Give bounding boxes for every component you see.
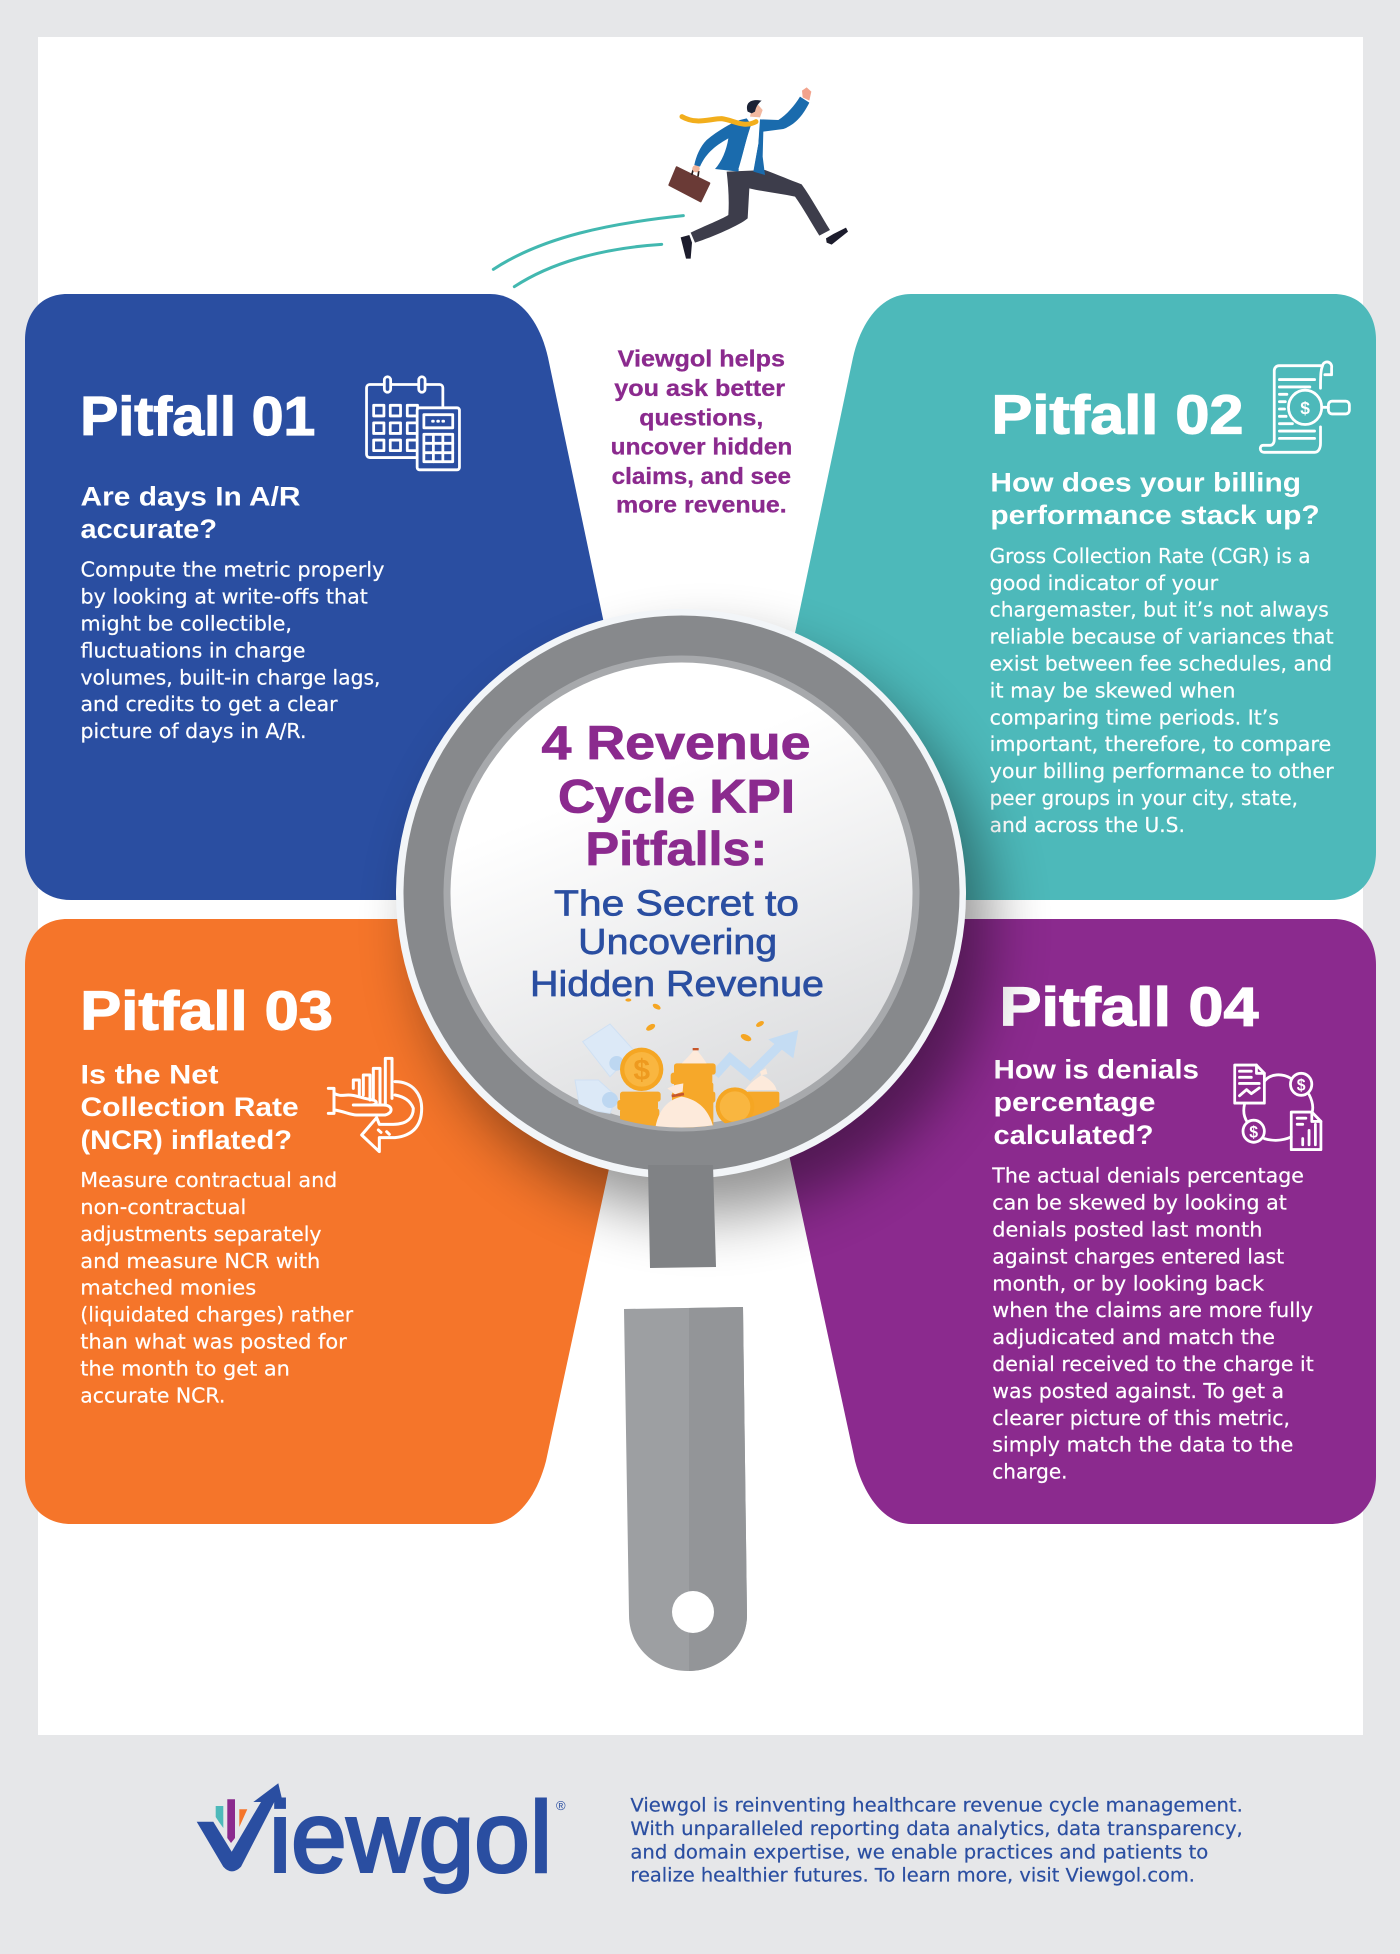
body text: denials posted last month	[992, 1218, 1262, 1242]
body text: it may be skewed when	[990, 678, 1236, 702]
callout: Viewgol helps	[611, 346, 792, 518]
body text: than what was posted for	[80, 1330, 348, 1354]
body text: Measure contractual and	[80, 1168, 337, 1192]
body text	[990, 544, 1334, 837]
question	[994, 1055, 1199, 1150]
subtitle: The Secret to Uncovering Hidden Revenue: The Secret to	[554, 883, 799, 924]
body text: exist between fee schedules, and	[990, 652, 1332, 676]
body text: against charges entered last	[992, 1244, 1284, 1268]
callout: Viewgol helps: you ask better	[614, 375, 785, 401]
callout: Viewgol helps: uncover hidden	[611, 434, 792, 460]
icon: hand with bar chart and return arrow	[328, 1058, 422, 1152]
illustration: coins and money	[575, 998, 798, 1132]
body text: Compute the metric properly	[80, 558, 385, 582]
footer description: Viewgol is reinventing healthcare revenue cycle management.	[630, 1796, 1243, 1817]
question: accurate?	[80, 514, 217, 544]
question: (NCR) inflated?	[80, 1125, 292, 1155]
body text: comparing time periods. It’s	[990, 705, 1279, 729]
illustration: running businessman with briefcase	[493, 87, 848, 287]
illustration: coins and money: $	[633, 1054, 650, 1087]
subtitle: The Secret to Uncovering Hidden Revenue: Hidden Revenue	[530, 963, 824, 1004]
callout: Viewgol helps: more revenue.	[616, 492, 787, 518]
footer description	[630, 1796, 1243, 1887]
subtitle: The Secret to Uncovering Hidden Revenue: Uncovering	[578, 921, 777, 962]
panel: Pitfall 02	[791, 294, 1376, 900]
magnifying glass lens	[396, 609, 966, 1179]
question: calculated?	[994, 1120, 1154, 1150]
body text: can be skewed by looking at	[992, 1191, 1287, 1215]
body text: month, or by looking back	[992, 1271, 1264, 1295]
body text: denial received to the charge it	[992, 1352, 1314, 1376]
footer logo: Viewgol: ®	[556, 1798, 566, 1813]
heading: Pitfall 03: Pitfall 03	[80, 980, 333, 1042]
body text: was posted against. To get a	[992, 1379, 1284, 1403]
body text: The actual denials percentage	[991, 1164, 1304, 1188]
title: 4 Revenue Cycle KPI Pitfalls: 4 Revenue	[542, 716, 810, 769]
body text: peer groups in your city, state,	[990, 786, 1298, 810]
body text: accurate NCR.	[80, 1383, 225, 1407]
body text: your billing performance to other	[990, 759, 1334, 783]
panel: Pitfall 01	[25, 294, 610, 900]
lens drop shadow	[420, 645, 990, 1215]
title: 4 Revenue Cycle KPI Pitfalls: Pitfalls:	[586, 822, 767, 875]
question: Is the Net	[80, 1060, 219, 1090]
question: How is denials	[994, 1055, 1199, 1085]
question	[80, 481, 300, 544]
title: 4 Revenue Cycle KPI Pitfalls	[542, 716, 810, 875]
body text: and credits to get a clear	[80, 692, 338, 716]
icon: documents and dollar cycle: $	[1249, 1123, 1258, 1141]
body text	[80, 1168, 354, 1407]
magnifying glass handle	[624, 1307, 747, 1671]
body text: non-contractual	[80, 1195, 246, 1219]
body text: chargemaster, but it’s not always	[990, 598, 1329, 622]
body text	[80, 558, 385, 743]
callout: Viewgol helps: Viewgol helps	[618, 346, 785, 372]
body text: picture of days in A/R.	[80, 719, 306, 743]
body text: and across the U.S.	[990, 813, 1185, 837]
body text: adjudicated and match the	[992, 1325, 1275, 1349]
body text: matched monies	[80, 1276, 256, 1300]
question	[80, 1060, 299, 1155]
question: Collection Rate	[80, 1092, 299, 1122]
question: percentage	[994, 1087, 1156, 1117]
panel: Pitfall 04	[788, 919, 1376, 1524]
body text: volumes, built-in charge lags,	[80, 665, 381, 689]
icon: documents and dollar cycle: $	[1297, 1076, 1306, 1094]
body text: might be collectible,	[80, 612, 292, 636]
heading: Pitfall 04: Pitfall 04	[1000, 976, 1259, 1038]
body text: reliable because of variances that	[990, 625, 1334, 649]
body text: fluctuations in charge	[80, 638, 306, 662]
body text: charge.	[992, 1460, 1068, 1484]
body text: clearer picture of this metric,	[992, 1406, 1290, 1430]
question: How does your billing	[990, 467, 1301, 497]
footer description: realize healthier futures. To learn more, visit Viewgol.com.	[630, 1866, 1195, 1887]
body text: good indicator of your	[990, 571, 1219, 595]
icon: calendar and calculator	[367, 377, 459, 470]
panel: Pitfall 03	[25, 919, 613, 1524]
question	[990, 467, 1320, 530]
heading: Pitfall 01: Pitfall 01	[80, 385, 315, 447]
body text	[991, 1164, 1314, 1484]
body text: important, therefore, to compare	[990, 732, 1331, 756]
icon: documents and dollar cycle	[1235, 1065, 1321, 1150]
callout: Viewgol helps: claims, and see	[612, 463, 791, 489]
magnifying glass neck	[648, 1165, 716, 1268]
body text: by looking at write-offs that	[80, 585, 368, 609]
body text: and measure NCR with	[80, 1249, 320, 1273]
body text: when the claims are more fully	[992, 1298, 1313, 1322]
body text: adjustments separately	[80, 1222, 322, 1246]
footer description: With unparalleled reporting data analytics, data transparency,	[630, 1819, 1243, 1840]
heading: Pitfall 02: Pitfall 02	[992, 384, 1244, 446]
icon: receipt with dollar lens: $	[1300, 398, 1310, 418]
body text: simply match the data to the	[992, 1433, 1293, 1457]
footer logo: Viewgol: iewgol	[269, 1782, 552, 1894]
callout: Viewgol helps: questions,	[639, 405, 763, 431]
question: performance stack up?	[990, 500, 1320, 530]
body text: the month to get an	[80, 1356, 290, 1380]
title: 4 Revenue Cycle KPI Pitfalls: Cycle KPI	[558, 769, 795, 822]
footer description: and domain expertise, we enable practices and patients to	[630, 1842, 1208, 1863]
body text: Gross Collection Rate (CGR) is a	[990, 544, 1311, 568]
subtitle: The Secret to Uncovering Hidden Revenue	[530, 883, 824, 1004]
body text: (liquidated charges) rather	[80, 1303, 354, 1327]
question: Are days In A/R	[80, 481, 300, 511]
icon: receipt with dollar lens	[1260, 362, 1349, 452]
